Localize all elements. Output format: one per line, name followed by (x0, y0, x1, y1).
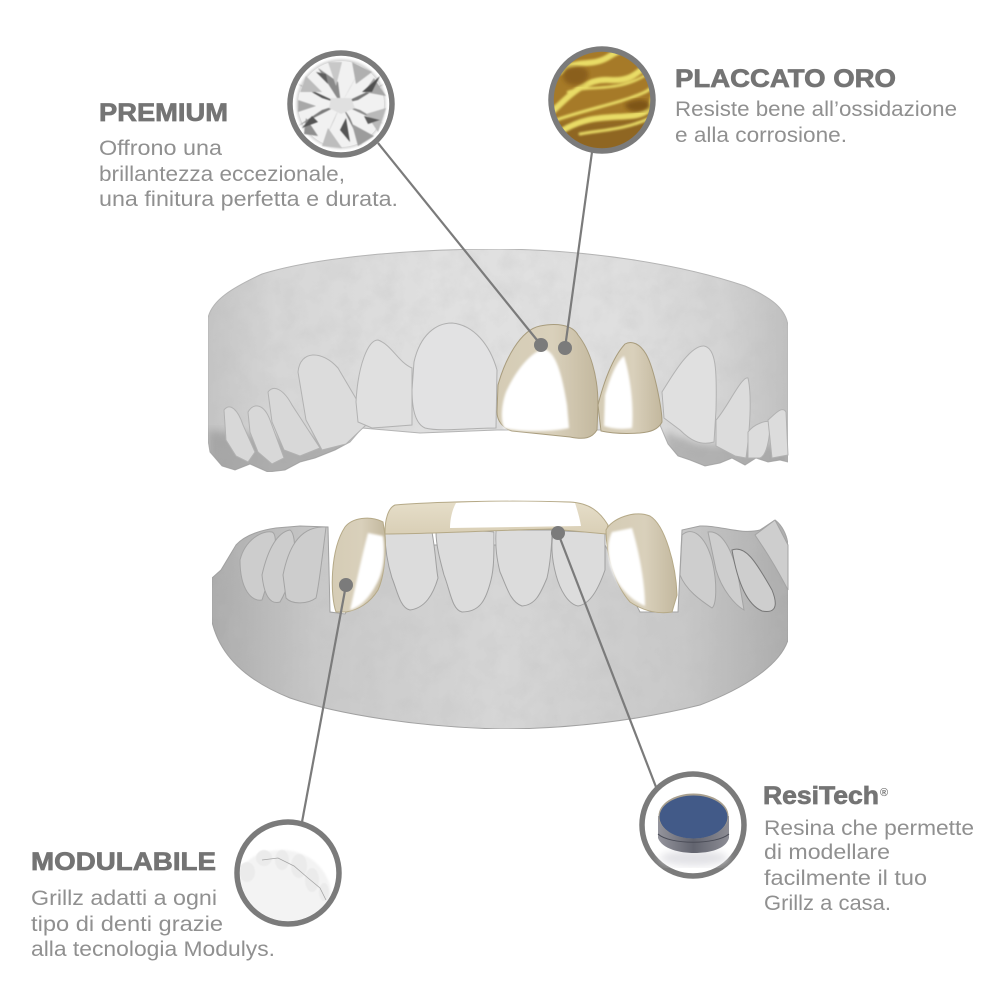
bridge highlight (450, 502, 581, 528)
crown highlight (604, 356, 633, 429)
lower side teeth right (680, 520, 788, 612)
heading: resitech: ResiTech (763, 782, 879, 810)
gold bridge (385, 501, 608, 534)
registered mark: ® (880, 787, 888, 799)
leader: premium (378, 143, 541, 345)
icon: resin jar (642, 774, 744, 876)
icon: diamond (290, 53, 392, 155)
leader: placcato oro (565, 152, 592, 348)
cap highlight (608, 528, 645, 606)
heading: premium: PREMIUM (99, 99, 228, 127)
body: placcato oro: Resiste bene all’ossidazione (675, 98, 957, 121)
heading: modulabile: MODULABILE (31, 848, 216, 876)
body: modulabile (31, 887, 275, 961)
upper gum (208, 249, 788, 472)
text block: resitech (763, 782, 974, 915)
body: premium (99, 137, 398, 211)
dot: modulabile (339, 578, 353, 592)
body: premium: Offrono una (99, 137, 222, 160)
body: resitech (764, 817, 974, 915)
gold crown: central tooth (497, 325, 598, 438)
icon: modular dental model (237, 822, 339, 930)
body: resitech: facilmente il tuo (764, 867, 927, 890)
heading: placcato oro: PLACCATO ORO (675, 65, 896, 93)
body: resitech: Grillz a casa. (764, 892, 891, 915)
body: resitech: di modellare (764, 841, 890, 864)
leader: modulabile (302, 585, 346, 822)
crown highlight (502, 349, 569, 431)
dot: placcato oro (558, 341, 572, 355)
upper shadow under back teeth (208, 428, 788, 472)
leader lines and dots (302, 143, 656, 822)
text block: modulabile (31, 848, 275, 961)
gold cap: right canine (606, 514, 677, 613)
lower side teeth left (240, 527, 326, 603)
body: placcato oro (675, 98, 957, 147)
gold crown: lateral tooth (598, 342, 662, 433)
upper side teeth left (224, 340, 412, 464)
body: modulabile: alla tecnologia Modulys. (31, 938, 275, 961)
upper side teeth right (662, 346, 788, 458)
body: modulabile: Grillz adatti a ogni (31, 887, 217, 910)
lower dental model (212, 501, 788, 729)
body: placcato oro: e alla corrosione. (675, 124, 847, 147)
dot: resitech (551, 526, 565, 540)
cap highlight (350, 533, 384, 610)
icon: gold texture (548, 48, 656, 156)
dot: premium (534, 338, 548, 352)
text block: placcato oro (675, 65, 957, 147)
body: resitech: Resina che permette (764, 817, 974, 840)
leader: resitech (558, 533, 656, 787)
lower incisors (385, 530, 605, 612)
body: premium: una finitura perfetta e durata. (99, 188, 398, 211)
text block: premium (99, 99, 398, 211)
body: modulabile: tipo di denti grazie (31, 913, 223, 936)
upper dental model (208, 249, 788, 480)
gold cap: left canine (332, 518, 385, 612)
lower gum (212, 520, 788, 729)
upper central incisor (412, 323, 497, 430)
body: premium: brillantezza eccezionale, (99, 163, 345, 186)
